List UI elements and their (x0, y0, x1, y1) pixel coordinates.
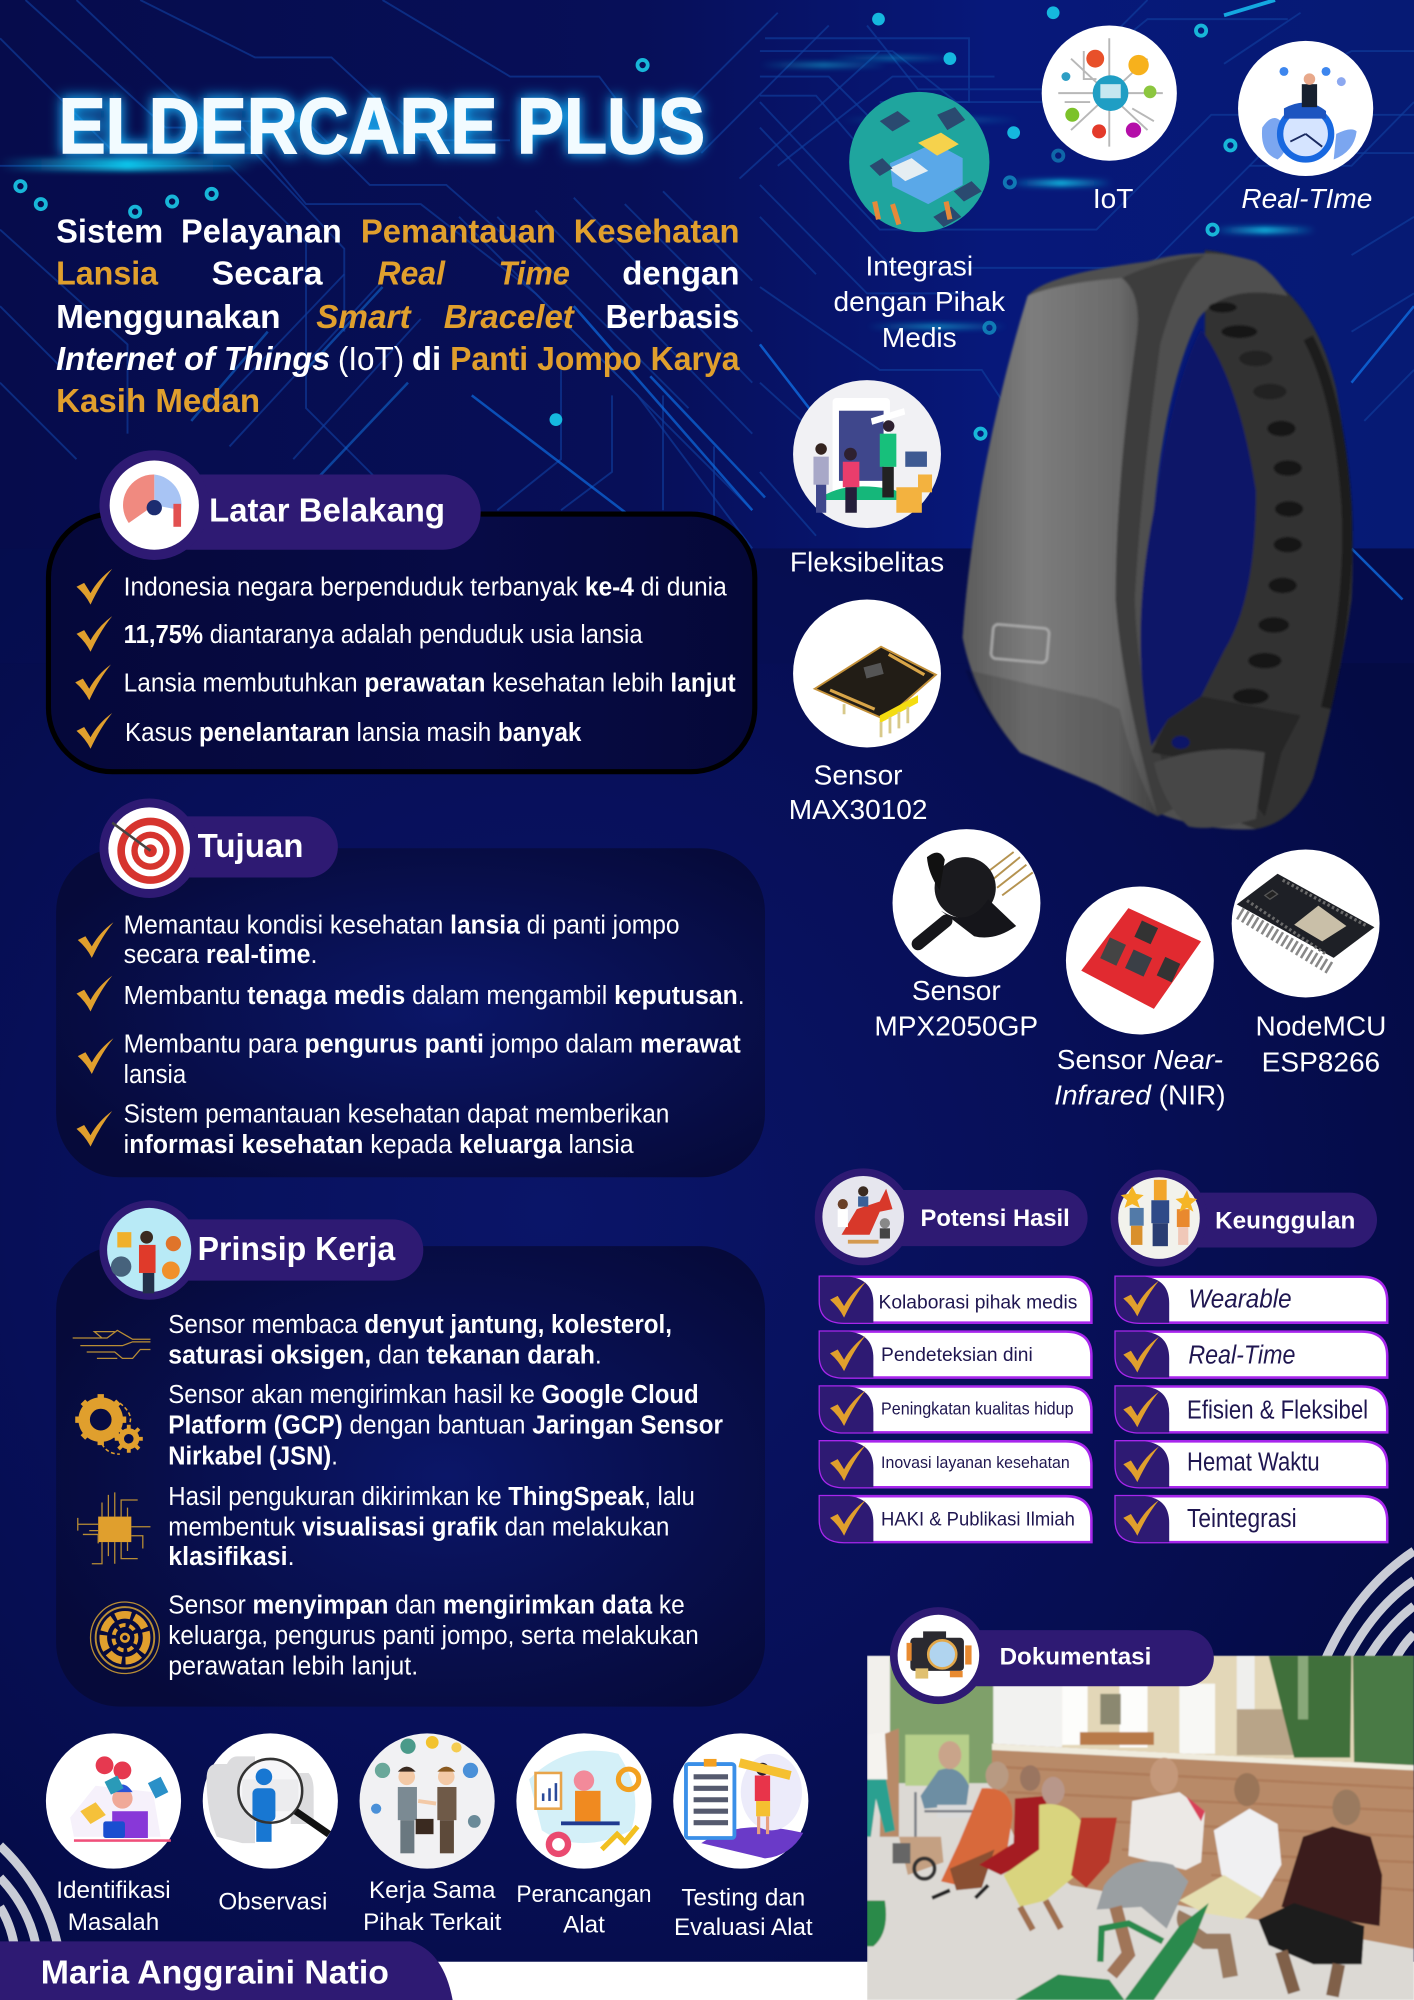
subtitle: Pelayanan (181, 213, 342, 250)
subtitle: Smart (316, 299, 413, 336)
step: Identifikasi Masalah: Masalah (68, 1909, 159, 1936)
text block: goals list: Membantu para pengurus panti jompo dalam merawat (124, 1030, 741, 1058)
feature: IoT (1042, 26, 1177, 214)
feature: Integrasi dengan Pihak Medis: dengan Pihak (834, 286, 1006, 317)
feature: Real-Time: Real-TIme (1241, 183, 1372, 214)
icon: data ring (91, 1602, 159, 1673)
list: Potensi Hasil: HAKI & Publikasi Ilmiah (881, 1509, 1075, 1531)
feature: Integrasi dengan Pihak Medis: Medis (882, 322, 957, 353)
icon: circuit lines (73, 1330, 150, 1358)
heading: Dokumentasi (890, 1607, 1214, 1704)
feature: Integrasi dengan Pihak Medis (834, 92, 1006, 353)
text block: goals list: informasi kesehatan kepada keluarga lansia (124, 1131, 634, 1159)
text block: working principle: Hasil pengukuran dikirimkan ke ThingSpeak, lalu (168, 1483, 695, 1511)
step: Kerja Sama Pihak Terkait (360, 1733, 502, 1936)
text block: background list: Kasus penelantaran lansia masih banyak (125, 719, 582, 747)
green chair (1015, 1974, 1125, 2000)
list: Keunggulan: Wearable (1188, 1285, 1292, 1313)
smart bracelet image (963, 250, 1353, 829)
step: Kerja Sama Pihak Terkait: Kerja Sama (369, 1877, 496, 1904)
text block: working principle (168, 1311, 723, 1681)
component: NodeMCU ESP8266: NodeMCU (1255, 1011, 1386, 1042)
subtitle: Panti Jompo Karya (450, 341, 740, 378)
list: Keunggulan: Teintegrasi (1187, 1505, 1297, 1533)
text block: working principle: Sensor menyimpan dan mengirimkan data ke (168, 1592, 685, 1620)
heading: Potensi Hasil: Potensi Hasil (921, 1205, 1070, 1231)
text block: background list: 11,75% diantaranya adalah penduduk usia lansia (124, 621, 643, 649)
step: Identifikasi Masalah (46, 1733, 181, 1936)
yellow dress woman (1042, 1777, 1065, 1805)
circuit pattern (0, 0, 1414, 599)
man in white polo (1234, 1773, 1260, 1806)
subtitle: Time (499, 255, 570, 292)
heading: Potensi Hasil (815, 1168, 1088, 1265)
heading: Latar Belakang: Latar Belakang (209, 493, 445, 530)
panel: Prinsip Kerja (56, 1200, 765, 1707)
text block: goals list: Memantau kondisi kesehatan lansia di panti jompo (124, 912, 680, 940)
decorative arcs (0, 1551, 1414, 1944)
text block: goals list: lansia (124, 1061, 187, 1089)
heading: Prinsip Kerja (99, 1200, 423, 1300)
step: Observasi: Observasi (218, 1888, 327, 1915)
step: Testing dan Evaluasi Alat: Evaluasi Alat (674, 1914, 813, 1941)
feature: Fleksibelitas (790, 380, 944, 577)
heading: Prinsip Kerja: Prinsip Kerja (198, 1231, 396, 1268)
icon: chip (78, 1492, 150, 1564)
wheelchair man (921, 1768, 969, 1809)
heading: Keunggulan (1111, 1170, 1377, 1267)
heading: Tujuan (99, 798, 338, 898)
text block: working principle: saturasi oksigen, dan tekanan darah. (168, 1342, 602, 1370)
footer: author: Maria Anggraini Natio (41, 1954, 389, 1991)
text block: working principle: membentuk visualisasi grafik dan melakukan (168, 1514, 669, 1542)
subtitle: Sistem (56, 213, 163, 250)
text block: goals list (124, 912, 745, 1159)
list: Keunggulan: Efisien & Fleksibel (1187, 1396, 1368, 1424)
subtitle: Kesehatan (574, 213, 740, 250)
text block: background list (124, 574, 736, 747)
text block: working principle: keluarga, pengurus panti jompo, serta melakukan (168, 1622, 699, 1650)
text block: working principle: Sensor membaca denyut jantung, kolesterol, (168, 1311, 672, 1339)
component: NodeMCU ESP8266: ESP8266 (1262, 1046, 1380, 1077)
feature: Integrasi dengan Pihak Medis: Integrasi (866, 251, 973, 282)
step: Testing dan Evaluasi Alat: Testing dan (681, 1885, 805, 1912)
component: NodeMCU ESP8266 (1232, 849, 1386, 1077)
subtitle: Berbasis (606, 299, 740, 336)
list: Potensi Hasil: Peningkatan kualitas hidup (881, 1399, 1074, 1419)
subtitle: Menggunakan (56, 299, 281, 336)
text block: working principle: perawatan lebih lanjut. (168, 1653, 418, 1681)
orange dress woman (986, 1761, 1009, 1790)
footer: author (0, 1941, 453, 2000)
red dress woman (1020, 1765, 1040, 1791)
icon: gears (75, 1394, 143, 1454)
text block: working principle: Nirkabel (JSN). (168, 1442, 338, 1470)
heading: Keunggulan: Keunggulan (1215, 1207, 1355, 1233)
subtitle: dengan (622, 255, 740, 292)
heading: Latar Belakang (99, 450, 481, 560)
panel: Tujuan (56, 798, 765, 1177)
man in white shirt (1150, 1758, 1178, 1793)
title: ELDERCARE PLUS (59, 81, 705, 170)
heading: Tujuan: Tujuan (198, 828, 303, 865)
text block: goals list: Sistem pemantauan kesehatan dapat memberikan (124, 1100, 669, 1128)
step: Identifikasi Masalah: Identifikasi (56, 1877, 171, 1904)
component: Sensor MAX30102: Sensor (814, 759, 903, 790)
list: Potensi Hasil: Inovasi layanan kesehatan (881, 1453, 1070, 1472)
photo: documentation (867, 1656, 1414, 2000)
text block: goals list: Membantu tenaga medis dalam mengambil keputusan. (124, 982, 745, 1010)
list: Potensi Hasil: Pendeteksian dini (881, 1344, 1033, 1366)
subtitle: di (412, 341, 441, 378)
component: Sensor MAX30102 (789, 599, 941, 825)
text block: working principle: Sensor akan mengirimkan hasil ke Google Cloud (168, 1381, 699, 1409)
step: Testing dan Evaluasi Alat (673, 1733, 813, 1941)
component: Sensor MPX2050GP (874, 829, 1040, 1042)
step: Perancangan Alat: Perancangan (516, 1881, 652, 1908)
component: Sensor MPX2050GP: MPX2050GP (874, 1011, 1038, 1042)
component: Sensor Near-Infrared (1054, 886, 1226, 1111)
component: Sensor MPX2050GP: Sensor (912, 975, 1001, 1006)
text block: background list: Lansia membutuhkan perawatan kesehatan lebih lanjut (124, 669, 736, 697)
subtitle: Internet of Things (56, 341, 330, 378)
step: Observasi (203, 1733, 338, 1915)
list: Potensi Hasil (820, 1277, 1091, 1542)
subtitle: Bracelet (444, 299, 576, 336)
subtitle: Lansia (56, 255, 159, 292)
subtitle: (IoT) (338, 341, 404, 378)
feature: Fleksibelitas: Fleksibelitas (790, 546, 944, 577)
component: Sensor MAX30102: MAX30102 (789, 794, 927, 825)
subtitle: Kasih Medan (56, 383, 260, 420)
component: Sensor Near-Infrared: Sensor Near- (1057, 1044, 1223, 1075)
subtitle: Pemantauan (361, 213, 556, 250)
list: Keunggulan: Hemat Waktu (1187, 1449, 1320, 1477)
text block: working principle: Platform (GCP) dengan bantuan Jaringan Sensor (168, 1412, 723, 1440)
feature: IoT: IoT (1093, 183, 1133, 214)
component: Sensor Near-Infrared: Infrared (NIR) (1054, 1080, 1226, 1111)
list: Keunggulan (1116, 1277, 1387, 1542)
step: Kerja Sama Pihak Terkait: Pihak Terkait (363, 1909, 502, 1936)
feature: Real-Time (1238, 41, 1373, 214)
subtitle (56, 213, 740, 420)
red bench (1071, 1818, 1117, 1888)
list: Potensi Hasil: Kolaborasi pihak medis (878, 1292, 1078, 1314)
step: Perancangan Alat (516, 1733, 652, 1938)
subtitle: Real (377, 255, 446, 292)
step: Perancangan Alat: Alat (563, 1911, 605, 1938)
list: Keunggulan: Real-Time (1188, 1342, 1295, 1370)
heading: Dokumentasi: Dokumentasi (1000, 1644, 1151, 1670)
text block: goals list: secara real-time. (124, 941, 317, 969)
subtitle: Secara (212, 255, 323, 292)
text block: working principle: klasifikasi. (168, 1543, 295, 1571)
title: ELDERCARE PLUS (59, 81, 705, 170)
text block: background list: Indonesia negara berpenduduk terbanyak ke-4 di dunia (124, 574, 728, 602)
man in dark shirt (1332, 1790, 1360, 1825)
panel: Latar Belakang (48, 450, 755, 772)
